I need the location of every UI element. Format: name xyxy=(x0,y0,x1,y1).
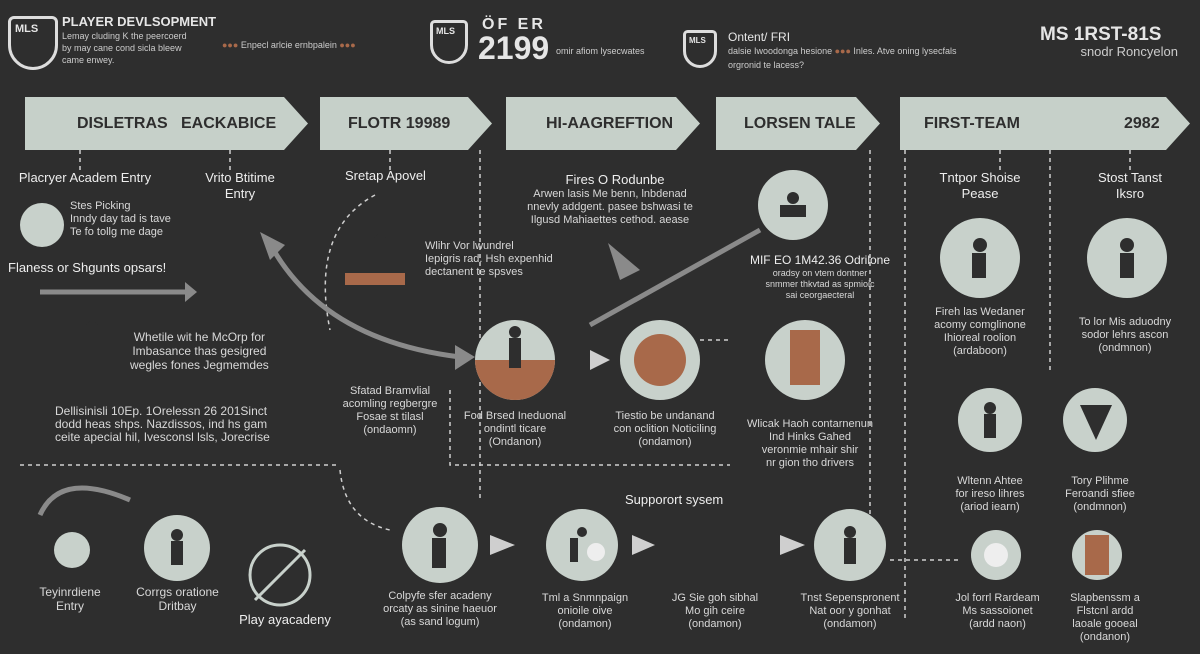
text: (ondaomn) xyxy=(363,424,417,436)
text: (Ondanon) xyxy=(489,436,541,448)
stage banners xyxy=(25,97,308,150)
text: Dritbay xyxy=(158,599,196,613)
text: sai ceorgaecteral xyxy=(786,290,854,300)
text: FIRST-TEAM xyxy=(924,115,1020,132)
text: Teyinrdiene xyxy=(39,585,101,599)
text: 2982 xyxy=(1124,115,1160,132)
text: by may cane cond sicla bleew xyxy=(62,43,182,53)
text: con oclition Noticiling xyxy=(614,423,716,435)
text: Fireh las Wedaner xyxy=(935,306,1025,318)
text: Iksro xyxy=(1116,186,1144,201)
text: (ondamon) xyxy=(688,618,742,630)
text: Fosae st tilasl xyxy=(356,411,424,423)
text: for ireso lihres xyxy=(955,488,1025,500)
text: Tntpor Shoise xyxy=(940,170,1020,185)
text: (ondanon) xyxy=(1080,631,1130,643)
text: Colpyfe sfer acadeny xyxy=(388,590,492,602)
text: orcaty as sinine haeuor xyxy=(383,603,497,615)
text: Inndy day tad is tave xyxy=(70,213,171,225)
text: Mo gih ceire xyxy=(685,605,745,617)
text: Wlihr Vor lwundrel xyxy=(425,240,514,252)
text: (as sand logum) xyxy=(401,616,479,628)
text: Tory Plihme xyxy=(1071,475,1129,487)
text: Imbasance thas gesigred xyxy=(132,344,266,358)
text: oradsy on vtem dontner xyxy=(773,268,867,278)
text: (ondmnon) xyxy=(1073,501,1127,513)
text: Supporort sysem xyxy=(625,492,723,507)
text: FLOTR 19989 xyxy=(348,115,450,132)
text: sodor lehrs ascon xyxy=(1082,329,1168,341)
header: center: MLS xyxy=(436,26,455,36)
header: right: MLS xyxy=(689,36,706,45)
text: Fod Brsed Ineduonal xyxy=(464,410,566,422)
text: Fires O Rodunbe xyxy=(566,172,664,187)
text: 2199 xyxy=(478,30,549,66)
text: Arwen lasis Me benn, lnbdenad xyxy=(533,188,687,200)
text: PLAYER DEVLSOPMENT xyxy=(62,14,216,29)
text: orgronid te lacess? xyxy=(728,60,804,70)
text: Iepigris rad. Hsh expenhid xyxy=(425,253,553,265)
text: onioile oive xyxy=(557,605,613,617)
header: left logo and title xyxy=(8,16,58,70)
text: Corrgs oratione xyxy=(136,585,219,599)
stage banners: DISLETRAS EACKABICE xyxy=(77,115,276,132)
text: Ontent/ FRI xyxy=(728,30,790,44)
text: MIF EO 1M42.36 Odrilone xyxy=(750,253,890,267)
text: Play ayacadeny xyxy=(239,612,331,627)
text: Ihioreal roolion xyxy=(944,332,1016,344)
header: center xyxy=(430,20,468,64)
text: snodr Roncyelon xyxy=(1080,44,1178,59)
text: laoale gooeal xyxy=(1072,618,1138,630)
text: came enwey. xyxy=(62,55,114,65)
text: ÖF ER xyxy=(482,16,546,33)
text: Pease xyxy=(962,186,998,201)
text: wegles fones Jegmemdes xyxy=(130,358,269,372)
text: snmmer thkvtad as spmioic xyxy=(765,279,875,289)
header: right xyxy=(683,30,717,68)
text: Entry xyxy=(225,186,255,201)
text: LORSEN TALE xyxy=(744,115,856,132)
text: Sretap Apovel xyxy=(345,168,426,183)
text: veronmie mhair shir xyxy=(762,444,858,456)
text: Jol forrl Rardeam xyxy=(955,592,1040,604)
header: left logo and title: MLS xyxy=(15,23,38,35)
text: Feroandi sfiee xyxy=(1065,488,1135,500)
text: (ondamon) xyxy=(823,618,877,630)
text: ●●● Enpecl arlcie ernbpalein ●●● xyxy=(222,40,356,50)
text: JG Sie goh sibhal xyxy=(672,592,758,604)
text: Ms sassoionet xyxy=(962,605,1033,617)
texts: Placryer Academ Entry xyxy=(19,170,151,185)
text: Flaness or Shgunts opsars! xyxy=(8,260,166,275)
text: Lemay cluding K the peercoerd xyxy=(62,31,187,41)
text: Ind Hinks Gahed xyxy=(769,431,851,443)
text: acomling regbergre xyxy=(343,398,437,410)
text: Entry xyxy=(56,599,84,613)
text: acomy comglinone xyxy=(934,319,1026,331)
text: dectanent te spsves xyxy=(425,266,523,278)
text: Tnst Sepenspronent xyxy=(800,592,900,604)
text: (ondamon) xyxy=(638,436,692,448)
text: Vrito Btitime xyxy=(205,170,275,185)
text: omir afiom lysecwates xyxy=(556,46,645,56)
text: (ariod iearn) xyxy=(960,501,1020,513)
text: (ondmnon) xyxy=(1098,342,1152,354)
text: (ardaboon) xyxy=(953,345,1007,357)
text: To lor Mis aduodny xyxy=(1079,316,1171,328)
text: Dellisinisli 10Ep. 1Orelessn 26 201Sinct xyxy=(55,404,267,418)
text: ondintl ticare xyxy=(484,423,546,435)
text: Whetile wit he McOrp for xyxy=(134,330,265,344)
text: dalsie Iwoodonga hesione ●●● Inles. Atve oning lysecfals xyxy=(728,46,956,56)
text: Wltenn Ahtee xyxy=(957,475,1023,487)
text: Slapbenssm a xyxy=(1070,592,1140,604)
text: Stes Picking xyxy=(70,200,131,212)
text: HI-AAGREFTION xyxy=(546,115,673,132)
text: nnevly addgent. pasee bshwasi te xyxy=(527,201,693,213)
text: Ilgusd Mahiaettes cethod. aease xyxy=(531,214,689,226)
text: Tml a Snmnpaign xyxy=(542,592,628,604)
text: dodd heas shps. Nazdissos, ind hs gam xyxy=(55,417,267,431)
text: Te fo tollg me dage xyxy=(70,226,163,238)
text: Stost Tanst xyxy=(1098,170,1162,185)
text: MS 1RST-81S xyxy=(1040,24,1161,45)
text: (ondamon) xyxy=(558,618,612,630)
circles xyxy=(20,170,1167,583)
text: nr gion tho drivers xyxy=(766,457,854,469)
text: (ardd naon) xyxy=(969,618,1026,630)
text: Nat oor y gonhat xyxy=(809,605,891,617)
text: Tiestio be undanand xyxy=(615,410,715,422)
text: Wlicak Haoh contarnenun xyxy=(747,418,873,430)
text: Sfatad Bramvlial xyxy=(350,385,430,397)
text: Flstcnl ardd xyxy=(1077,605,1133,617)
text: ceite apecial hil, Ivesconsl lsls, Jorecrise xyxy=(55,430,270,444)
